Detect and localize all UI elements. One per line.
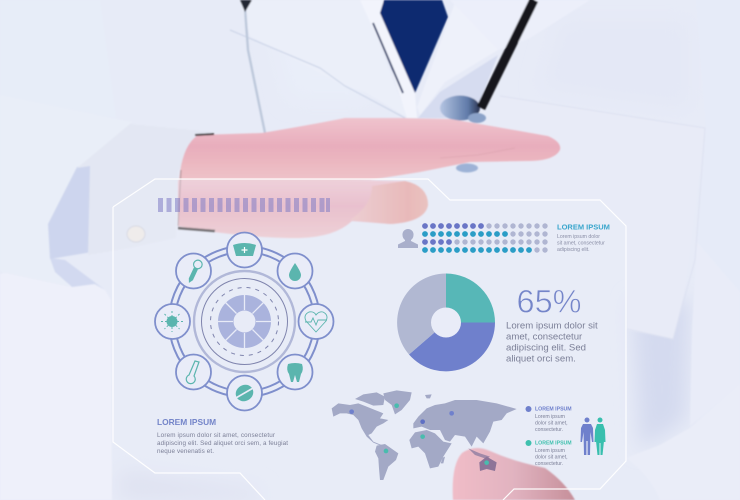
fingertip under panel	[453, 448, 575, 500]
icon: water drop	[289, 263, 301, 281]
legend: blue entry: Lorem ipsum	[535, 414, 565, 420]
icon: tooth	[287, 363, 303, 382]
icon: thermometer	[186, 361, 199, 384]
left lapel	[240, 0, 408, 118]
legend: teal entry: LOREM IPSUM	[535, 440, 572, 446]
left sleeve	[0, 95, 132, 287]
australia on fingertip	[479, 457, 497, 471]
icon: pill	[232, 381, 257, 405]
lower left text block: Lorem ipsum dolor sit amet, consectetur	[157, 432, 275, 439]
south america	[375, 444, 398, 480]
icon: nurse cap	[233, 243, 256, 256]
coat pocket	[500, 96, 705, 339]
world map	[332, 390, 517, 480]
pie description: adipiscing elit. Sed	[506, 342, 586, 354]
stethoscope tube	[481, 0, 534, 108]
pie description: Lorem ipsum dolor sit	[506, 320, 598, 332]
dot matrix chart	[422, 223, 548, 253]
legend: blue entry: LOREM IPSUM	[535, 406, 572, 412]
legend: teal entry: dolor sit amet,	[535, 454, 568, 460]
dot chart caption: Lorem ipsum dolor	[557, 234, 600, 240]
shirt cuff blue	[48, 164, 92, 259]
lower left text block	[157, 417, 288, 455]
dot chart caption: adipiscing elit.	[557, 247, 590, 253]
arctic islands	[355, 392, 385, 406]
striped progress bar	[158, 198, 330, 212]
under right lapel shadow	[418, 55, 498, 118]
right lapel	[417, 0, 528, 115]
panel tint	[113, 179, 626, 500]
pie description	[506, 320, 598, 364]
lower left text block: neque venenatis et.	[157, 448, 214, 455]
map location dots	[349, 403, 489, 465]
eurasia	[413, 400, 517, 447]
cufflink	[127, 226, 145, 242]
human body figures	[580, 418, 606, 455]
lower left text block: adipiscing elit. Sed aliquet orci sem, a feugiat	[157, 440, 288, 447]
thumb	[350, 181, 428, 224]
tie	[380, 0, 448, 93]
dot chart caption	[557, 222, 610, 253]
65 percent figure: 65%	[516, 284, 582, 320]
lower hand and thumb base	[178, 180, 428, 238]
female figure	[594, 418, 606, 455]
legend: teal entry	[526, 440, 572, 467]
stethoscope head	[440, 96, 480, 120]
legend: blue entry	[526, 406, 572, 433]
lower left text block: LOREM IPSUM	[157, 417, 216, 427]
pie description: amet, consectetur	[506, 332, 583, 342]
north america	[332, 403, 388, 446]
centre segmented disc	[218, 295, 271, 348]
panel outline	[113, 179, 626, 500]
legend: blue entry: dolor sit amet,	[535, 420, 568, 426]
dot chart caption: sit amet, consectetur	[557, 240, 605, 246]
upper hand	[179, 118, 560, 181]
icon: virus	[161, 311, 183, 332]
icon nodes	[155, 232, 334, 410]
legend: teal entry: Lorem ipsum	[535, 448, 565, 454]
medical icon wheel	[155, 232, 334, 410]
soft coat shading	[120, 20, 690, 500]
person icon	[398, 229, 418, 248]
shirt collar strips	[360, 0, 417, 118]
africa	[409, 430, 452, 468]
pie description: aliquet orci sem.	[506, 354, 576, 364]
collar shadow line	[373, 23, 403, 93]
icon: heart monitor	[305, 312, 327, 332]
icon: pipette	[185, 259, 204, 285]
iceland	[425, 394, 432, 398]
coat cuff	[77, 124, 214, 255]
madagascar	[441, 457, 445, 463]
greenland	[383, 390, 412, 414]
male figure	[580, 418, 594, 455]
right sleeve	[696, 0, 740, 292]
legend: teal entry: consectetur.	[535, 461, 563, 467]
right backdrop	[690, 242, 740, 426]
donut pie chart	[397, 274, 495, 371]
wrist band shadow	[178, 228, 215, 231]
left upper coat	[0, 0, 116, 118]
stethoscope left tube	[245, 8, 265, 133]
centre rings	[194, 271, 295, 372]
south east asia islands	[468, 448, 490, 459]
outer double ring	[175, 252, 314, 391]
lower left backdrop	[0, 262, 112, 500]
dot chart caption: LOREM IPSUM	[557, 222, 610, 232]
legend: blue entry: consectetur.	[535, 427, 563, 433]
